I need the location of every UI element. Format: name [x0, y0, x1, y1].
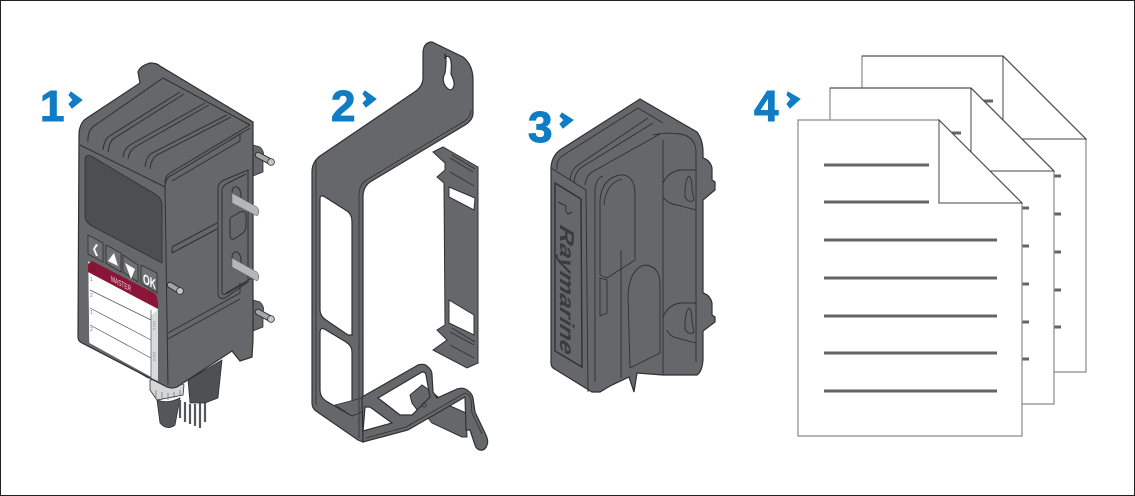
- clip plate ridges: [450, 155, 475, 358]
- number label 2: 2: [331, 82, 355, 131]
- MASTER text: MASTER: [111, 274, 131, 293]
- Raymarine logo: Raymarine: [555, 220, 579, 362]
- label card: CH 1: [152, 321, 157, 331]
- mounting pins: [232, 193, 259, 281]
- burgundy header: [88, 261, 158, 309]
- item 2: mounting bracket: [312, 42, 488, 450]
- number label 1: [40, 82, 82, 131]
- label card: 1: [90, 310, 93, 316]
- screen: [85, 156, 162, 263]
- middle page: [830, 88, 1054, 404]
- buttons: [88, 235, 157, 293]
- logo panel: [555, 183, 582, 367]
- small logo mark: [558, 202, 572, 214]
- item 3: cover: [528, 99, 715, 392]
- label card: CH 2: [152, 352, 157, 362]
- label card: [88, 261, 158, 381]
- number label 2: [331, 82, 376, 131]
- screws and connectors: [118, 145, 264, 428]
- number label 4: 4: [754, 82, 779, 131]
- back page: [862, 56, 1086, 372]
- screws: [170, 155, 274, 322]
- bracket flap: [410, 385, 467, 437]
- top ribs: [80, 78, 252, 385]
- cover detail lines: [551, 108, 696, 392]
- OK label: OK: [143, 272, 156, 293]
- number label 4: [754, 82, 800, 131]
- number label 3: 3: [528, 103, 552, 152]
- bracket floor piece: [335, 398, 362, 416]
- front page: [798, 120, 1022, 436]
- bracket lower arm: [362, 364, 488, 450]
- unit body: [78, 63, 253, 388]
- cover body: [551, 99, 715, 392]
- item 1: control unit: [40, 63, 274, 428]
- number label 3: [528, 103, 573, 152]
- label card: 1: [90, 277, 93, 283]
- clip plate: [433, 147, 478, 368]
- label card: 2: [90, 327, 93, 333]
- item 4: documents: [754, 56, 1086, 436]
- label card: 2: [90, 293, 93, 299]
- number label 1: 1: [40, 82, 64, 131]
- bracket frame: [312, 42, 473, 442]
- bracket inner edges: [316, 110, 482, 438]
